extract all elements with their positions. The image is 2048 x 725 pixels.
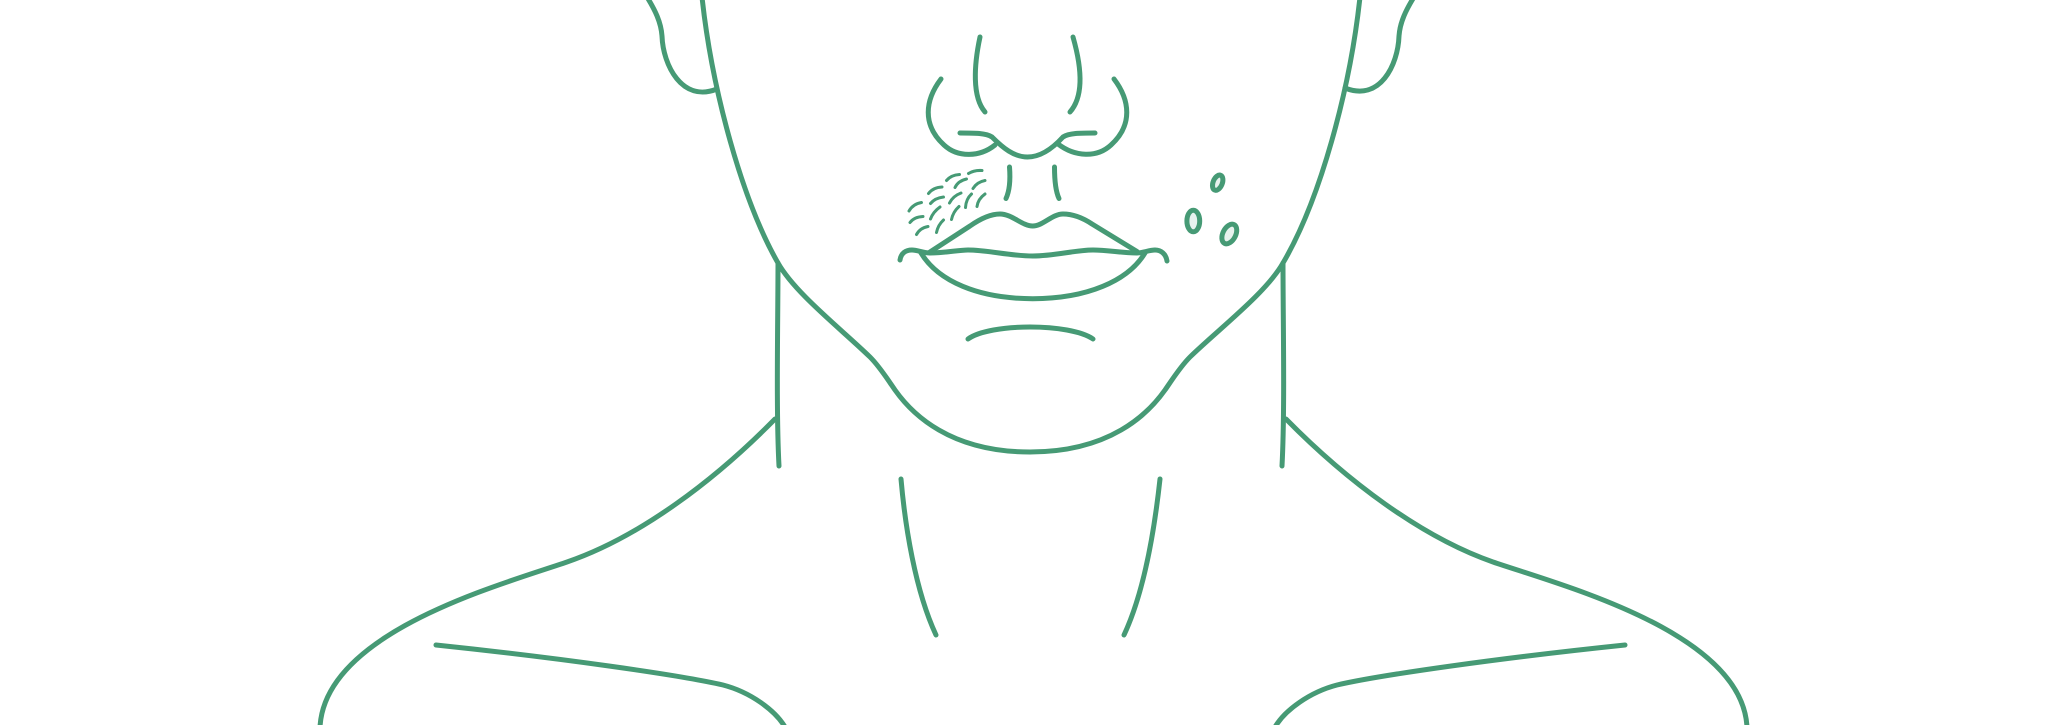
collarbones [436,645,1625,725]
chin crease [968,327,1093,339]
lips [900,214,1167,299]
neck sides [777,263,1284,466]
jaw and chin outline [702,0,1360,452]
facial hair [909,170,985,234]
neck tendons [901,479,1160,635]
left ear [647,0,717,92]
blemishes [1187,174,1240,246]
philtrum [1006,167,1059,198]
shoulders [320,419,1747,725]
nose [928,37,1127,157]
right ear [1345,0,1414,91]
